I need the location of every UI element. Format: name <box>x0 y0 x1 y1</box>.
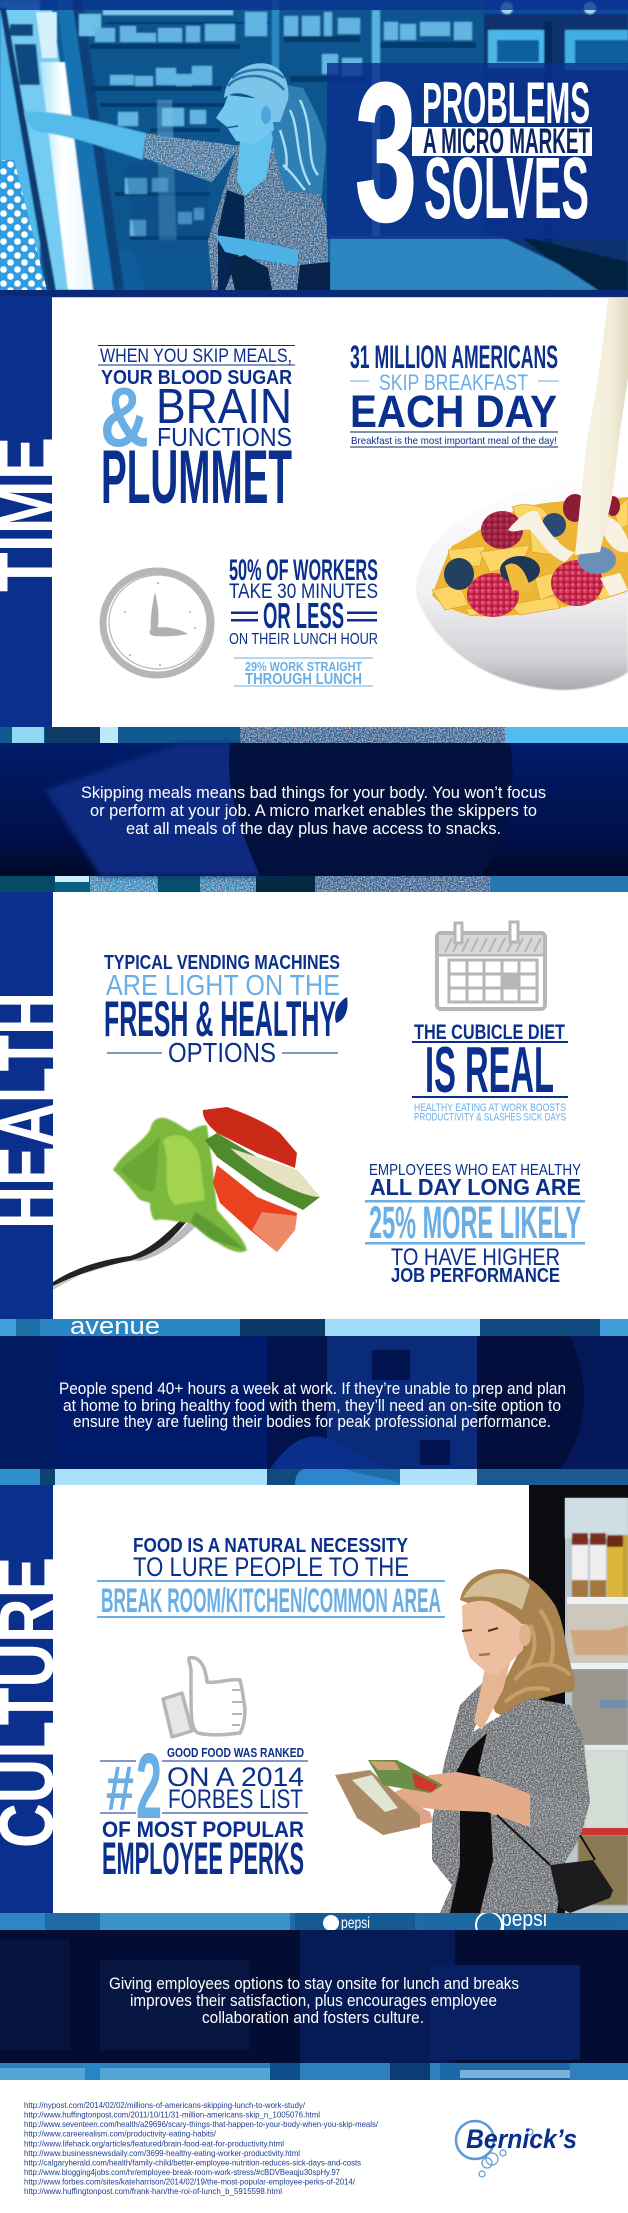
blueberries <box>444 558 474 590</box>
text block: band three message: improves their satisfaction, plus encourages employee <box>130 1991 497 2010</box>
text block: number two perk: ON A 2014 <box>167 1762 304 1792</box>
panel: culture section bar <box>0 1485 53 1913</box>
text block: source links: http://www.blogging4jobs.com/hr/employee-break-room-work-stress/#cBDVBeaqju30spHy.97 <box>24 2167 340 2177</box>
text block: 31 million americans: SKIP BREAKFAST <box>379 370 528 395</box>
text block: number two perk: FORBES LIST <box>168 1784 303 1814</box>
text block: source links: http://www.huffingtonpost.com/frank-han/the-roi-of-lunch_b_5915598.html <box>24 2186 282 2196</box>
text block: typical vending machines: FRESH & HEALTHY <box>104 991 336 1047</box>
text block: employees who eat healthy: ALL DAY LONG ARE <box>370 1174 581 1200</box>
panel: band two with message <box>0 1313 628 1485</box>
text block: band two message: ensure they are fueling their bodies for peak professional performance. <box>73 1413 551 1431</box>
sandwich package <box>335 1770 420 1835</box>
text block: band three message: collaboration and fosters culture. <box>202 2008 424 2027</box>
raspberries <box>467 573 519 617</box>
bowl <box>416 473 628 690</box>
floor <box>330 236 612 290</box>
panel: band three with message <box>0 1906 628 2080</box>
text block: skip meals: & <box>100 370 149 464</box>
text block: band one message: or perform at your job. A micro market enables the skippers to <box>90 801 537 820</box>
purse <box>550 1860 613 1913</box>
panel: health section bar <box>0 892 53 1319</box>
text block: band one message <box>81 783 546 838</box>
text block: employees who eat healthy: JOB PERFORMANCE <box>391 1265 560 1287</box>
right soda coolers <box>484 0 628 292</box>
text block: band two message: at home to bring healthy food with them, they’ll need an on-site option to <box>63 1397 561 1415</box>
text block: skip meals: BRAIN <box>156 380 292 434</box>
text block: typical vending machines: ARE LIGHT ON THE <box>106 970 340 1002</box>
icon: clock <box>103 571 211 675</box>
hair back <box>460 1569 575 1716</box>
text block: skip meals: PLUMMET <box>101 435 292 520</box>
text block: employees who eat healthy <box>365 1162 585 1287</box>
text block: 50 percent of workers: TAKE 30 MINUTES <box>229 580 378 603</box>
text block: 50 percent of workers <box>229 554 378 688</box>
text block: typical vending machines: TYPICAL VENDING MACHINES <box>104 952 340 974</box>
pepsi logos: pepsi <box>501 1906 547 1931</box>
panel: band one with message <box>0 727 628 892</box>
face and neck <box>474 1655 512 1730</box>
text block: number two perk: GOOD FOOD WAS RANKED <box>167 1745 304 1760</box>
logo: Bernick's: Bernick’s <box>466 2124 577 2154</box>
text block: source links: http://www.huffingtonpost.com/2011/10/11/31-million-americans-skip_n_1005076.html <box>24 2110 320 2120</box>
text block: 31 million americans <box>350 339 559 448</box>
cereal <box>432 497 628 617</box>
text: EMPLOYEE PERKS <box>102 1833 304 1884</box>
text block: number two perk: OF MOST POPULAR <box>102 1817 304 1842</box>
text block: food is a natural necessity <box>97 1535 445 1620</box>
text block: source links: http://www.careerealism.com/productivity-eating-habits/ <box>24 2129 217 2139</box>
logo: Bernick's <box>456 2121 577 2177</box>
text block: 50 percent of workers: OR LESS <box>263 595 344 636</box>
icon: calendar <box>437 922 545 1009</box>
title number 3: 3 <box>355 42 417 262</box>
text block: cubicle diet: THE CUBICLE DIET <box>414 1021 565 1044</box>
text block: skip meals: YOUR BLOOD SUGAR <box>101 367 292 389</box>
text block: food is a natural necessity: TO LURE PEOPLE TO THE <box>133 1552 409 1582</box>
woman in header <box>24 63 330 298</box>
text block: band two message <box>59 1380 566 1431</box>
hair <box>224 63 288 122</box>
panel: header photo of woman at micro market <box>0 0 628 298</box>
text block: band two message: People spend 40+ hours a week at work. If they’re unable to prep and plan <box>59 1380 566 1398</box>
text block: food is a natural necessity: FOOD IS A NATURAL NECESSITY <box>133 1535 409 1557</box>
text block: typical vending machines: OPTIONS <box>168 1037 276 1068</box>
hair highlights <box>463 1573 530 1610</box>
text block: number two perk: 2 <box>136 1734 162 1838</box>
text block: 50 percent of workers: 50% OF WORKERS <box>229 554 378 587</box>
text block: source links: http://calgaryherald.com/health/family-child/better-employee-nutrition-reduces-sick-days-and-costs <box>24 2157 361 2167</box>
top and bottom dark bands <box>0 0 628 10</box>
woman's cardigan <box>432 1678 590 1913</box>
text block: source links <box>24 2100 379 2196</box>
picture: woman holding a sandwich by a food cooler <box>335 1485 628 1913</box>
text block: 31 million americans: EACH DAY <box>350 386 557 437</box>
text block: skip meals <box>98 345 295 520</box>
text block: typical vending machines <box>104 952 348 1068</box>
pepsi logos <box>323 1913 546 1930</box>
left bars with section titles <box>0 298 52 727</box>
text block: number two perk: # <box>106 1754 134 1824</box>
text block: source links: http://www.lifehack.org/articles/featured/brain-food-eat-for-productivity.html <box>24 2138 284 2148</box>
text block: cubicle diet: PRODUCTIVITY & SLASHES SICK DAYS <box>414 1112 566 1124</box>
text block: skip meals: FUNCTIONS <box>157 422 292 452</box>
text block: 50 percent of workers: ON THEIR LUNCH HOUR <box>229 631 378 648</box>
text block: employees who eat healthy: EMPLOYEES WHO EAT HEALTHY <box>369 1162 581 1179</box>
milk stream <box>575 298 628 555</box>
text block: band three message: Giving employees options to stay onsite for lunch and breaks <box>109 1974 519 1993</box>
ponytail <box>270 84 326 195</box>
text block: cubicle diet <box>412 1021 568 1124</box>
woman's shirt <box>450 1733 493 1913</box>
icon: thumbs up <box>163 1658 245 1737</box>
text block: employees who eat healthy: TO HAVE HIGHER <box>391 1244 560 1271</box>
picture: milk pouring into cereal bowl <box>416 298 628 690</box>
text block: skip meals: WHEN YOU SKIP MEALS, <box>100 346 292 367</box>
text block: source links: http://www.seventeen.com/health/a29696/scary-things-that-happen-to-your-body-when-you-skip-meals/ <box>24 2119 379 2129</box>
text block: 31 million americans: Breakfast is the most important meal of the day! <box>351 435 557 447</box>
lower arm <box>215 235 298 266</box>
pepsi logos: pepsi <box>341 1915 370 1932</box>
text block: source links: http://nypost.com/2014/02/02/millions-of-americans-skipping-lunch-to-work-study/ <box>24 2100 306 2110</box>
arm <box>393 1772 533 1827</box>
text block: 50 percent of workers: 29% WORK STRAIGHT <box>245 659 362 674</box>
face <box>216 95 274 144</box>
picture: salad on fork <box>53 1107 320 1290</box>
text block: band three message <box>109 1974 519 2027</box>
milk splash <box>508 511 575 562</box>
text block: band one message: eat all meals of the day plus have access to snacks. <box>126 819 501 838</box>
storefront word: avenue <box>70 1313 160 1340</box>
panel: title overlay <box>327 42 628 262</box>
text block: 50 percent of workers: THROUGH LUNCH <box>245 671 362 688</box>
text block: source links: http://www.businessnewsdaily.com/3699-healthy-eating-worker-productivity.html <box>24 2148 300 2158</box>
text block: number two perk <box>100 1734 308 1884</box>
text block: source links: http://www.forbes.com/sites/kateharrison/2014/02/19/the-most-popular-employee-perks-of-2014/ <box>24 2177 356 2187</box>
text block: band one message: Skipping meals means bad things for your body. You won’t focus <box>81 783 546 802</box>
text block: cubicle diet: HEALTHY EATING AT WORK BOOSTS <box>414 1102 566 1114</box>
